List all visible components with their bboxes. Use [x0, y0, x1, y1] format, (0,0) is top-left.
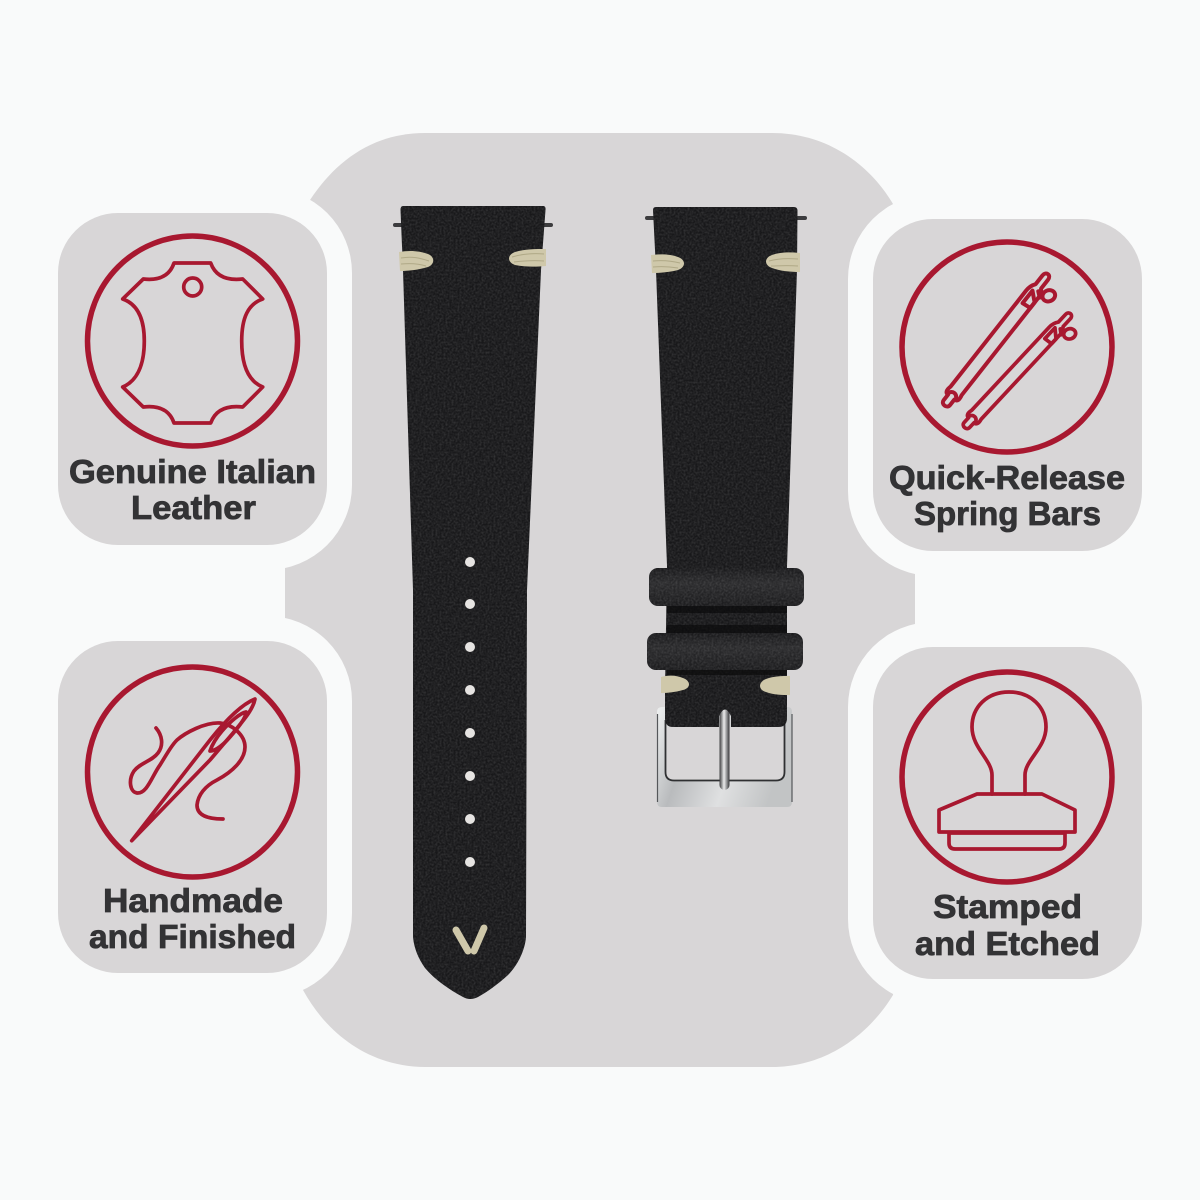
keeper shadows — [667, 604, 787, 675]
label: stamped and etched: and Etched — [915, 925, 1100, 962]
icon: needle and thread in circle — [88, 667, 298, 877]
icon: spring bar two — [959, 309, 1086, 441]
strap holes — [465, 557, 475, 867]
panel: quick-release spring bars — [873, 219, 1142, 551]
stitching: short strap top — [651, 252, 800, 273]
icon: spring bars in circle — [902, 242, 1112, 452]
label: quick-release spring bars: Quick-Release — [889, 459, 1125, 496]
label: stamped and etched — [915, 888, 1100, 962]
panel: stamped and etched — [873, 647, 1142, 979]
label: quick-release spring bars — [889, 459, 1125, 532]
label: handmade and finished: Handmade — [103, 882, 283, 919]
short watch strap with keepers and buckle — [645, 207, 807, 807]
panel: handmade and finished — [58, 641, 327, 973]
icon: spring bar one — [939, 269, 1065, 419]
icon: leather hide in circle — [88, 236, 298, 446]
label: stamped and etched: Stamped — [933, 888, 1082, 925]
label: genuine italian leather: Leather — [131, 489, 256, 526]
label: handmade and finished: and Finished — [89, 918, 296, 955]
keeper loop two — [647, 633, 803, 670]
panel: genuine italian leather — [58, 213, 327, 545]
long watch strap with holes — [393, 206, 553, 999]
label: quick-release spring bars: Spring Bars — [914, 495, 1101, 532]
label: genuine italian leather: Genuine Italian — [69, 453, 316, 490]
label: genuine italian leather — [69, 453, 316, 526]
stitching: short strap bottom — [661, 676, 790, 695]
stitching: long strap top — [399, 249, 546, 271]
buckle — [657, 706, 792, 807]
label: handmade and finished — [89, 882, 296, 955]
central panel behind straps — [33, 133, 1167, 1067]
keeper loop one — [649, 568, 804, 606]
stitching: strap tip — [456, 928, 484, 951]
icon: stamp in circle — [902, 672, 1112, 882]
